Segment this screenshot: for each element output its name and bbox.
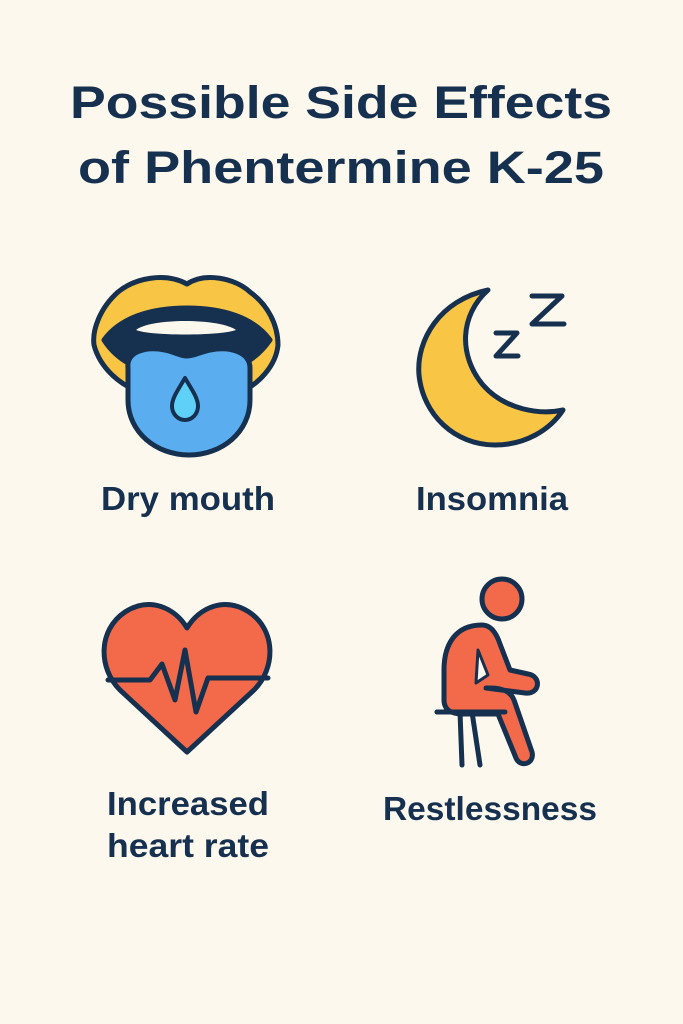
label: dry mouth: Dry mouth bbox=[101, 480, 275, 517]
icon: sitting person bbox=[437, 579, 537, 765]
title: of Phentermine K-25 bbox=[78, 142, 604, 193]
label: restlessness: Restlessness bbox=[383, 790, 597, 827]
label: insomnia: Insomnia bbox=[416, 480, 569, 517]
icon: moon bbox=[419, 290, 564, 445]
icon: heart bbox=[104, 605, 270, 752]
title: Possible Side Effects bbox=[70, 77, 612, 128]
icon: dry mouth bbox=[94, 278, 278, 455]
label: increased heart rate: Increased bbox=[107, 785, 269, 822]
title bbox=[70, 77, 612, 193]
label: increased heart rate: heart rate bbox=[107, 827, 269, 864]
